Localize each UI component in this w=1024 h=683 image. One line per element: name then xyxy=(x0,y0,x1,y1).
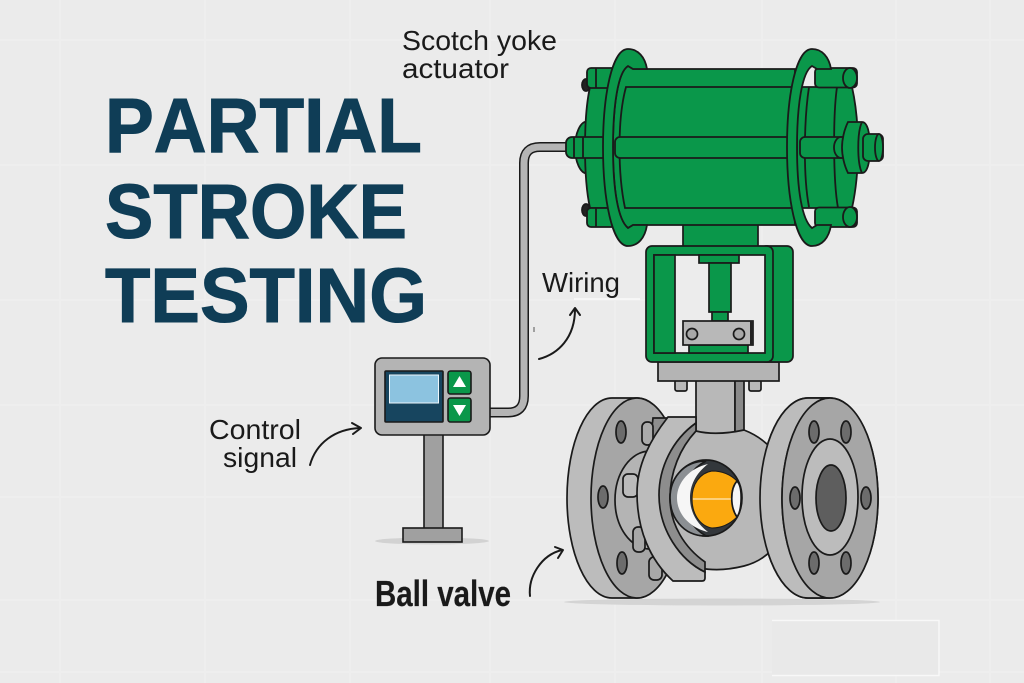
scotch yoke actuator xyxy=(566,49,883,246)
label: scotch yoke actuator: actuator xyxy=(402,53,509,84)
cylinder body xyxy=(613,66,795,228)
ball valve xyxy=(567,380,878,598)
right flange ring xyxy=(787,49,831,246)
valve neck xyxy=(696,380,744,434)
valve body xyxy=(662,430,790,570)
title xyxy=(105,83,427,339)
left end cap xyxy=(585,87,612,208)
yoke and mounting xyxy=(646,224,793,391)
control box xyxy=(375,358,490,435)
body collar xyxy=(637,417,705,581)
stem xyxy=(699,255,739,321)
right bolts xyxy=(815,68,857,227)
label: control signal: Control xyxy=(209,414,301,445)
yoke block xyxy=(683,321,753,353)
ball port xyxy=(670,460,742,536)
right flange face xyxy=(760,398,878,598)
label: control signal: signal xyxy=(223,442,297,473)
right end cap xyxy=(797,87,858,208)
arrow: control signal xyxy=(310,423,361,465)
label: control signal xyxy=(209,414,301,473)
up button xyxy=(448,371,471,394)
wiring pipe xyxy=(488,147,570,412)
tie rod xyxy=(615,137,793,158)
stand shadow xyxy=(375,538,489,544)
mounting plate xyxy=(658,362,779,381)
right flange rim xyxy=(760,398,878,598)
actuator neck xyxy=(683,224,758,247)
stand pole xyxy=(424,434,443,529)
label: scotch yoke actuator: Scotch yoke xyxy=(402,25,557,56)
arrow: ball valve xyxy=(530,547,563,596)
title: STROKE xyxy=(105,169,407,255)
left hub xyxy=(575,122,599,174)
right details xyxy=(800,87,883,207)
left bolts xyxy=(582,68,617,227)
down button xyxy=(448,398,471,422)
title: PARTIAL xyxy=(105,83,422,169)
stand base xyxy=(403,528,462,542)
label: wiring: Wiring xyxy=(542,267,620,298)
yoke frame xyxy=(646,246,793,362)
arrow: wiring xyxy=(539,308,580,359)
left flange xyxy=(567,398,685,598)
control unit xyxy=(375,358,490,544)
left rod end xyxy=(566,137,608,158)
valve ground shadow xyxy=(564,598,880,606)
left flange ring xyxy=(603,49,647,246)
screen xyxy=(385,371,443,422)
title: TESTING xyxy=(105,253,427,339)
cylinder panel xyxy=(620,87,792,208)
label: ball valve: Ball valve xyxy=(375,573,511,614)
label: scotch yoke actuator xyxy=(402,25,557,84)
mounting bolts xyxy=(675,380,761,391)
